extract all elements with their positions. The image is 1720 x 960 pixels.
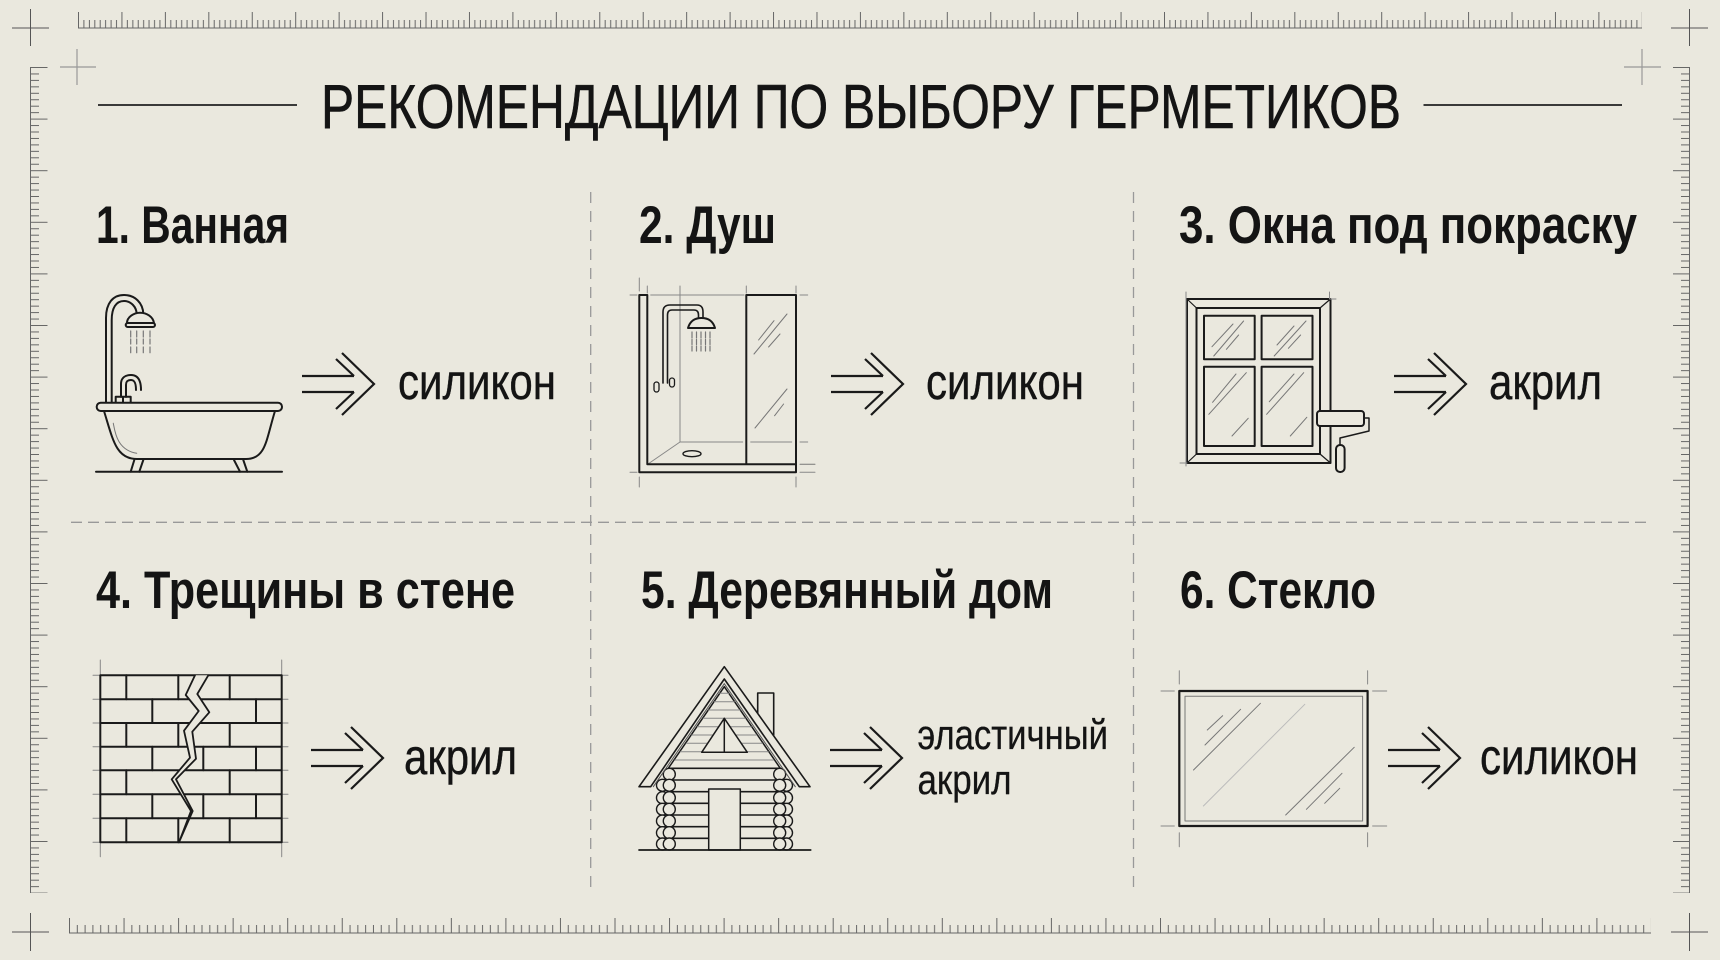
panel: 1 bath	[96, 196, 556, 472]
arrow 3	[1394, 353, 1466, 415]
result 1: силикон	[398, 354, 556, 410]
panel: 4 wall cracks	[93, 561, 517, 857]
grid dividers	[71, 192, 1649, 892]
panel: 2 shower	[630, 196, 1084, 487]
icon: glass pane	[1161, 671, 1387, 847]
result 2: силикон	[926, 354, 1084, 410]
icon: window with paint roller	[1180, 292, 1369, 472]
result 5	[918, 711, 1108, 803]
result 6: силикон	[1480, 729, 1638, 785]
icon: log cabin	[639, 667, 811, 850]
heading 4: 4. Трещины в стене	[96, 561, 515, 620]
heading 5: 5. Деревянный дом	[641, 561, 1053, 620]
panel: 3 window	[1179, 196, 1637, 472]
result 5: акрил	[918, 756, 1012, 803]
panel: 6 glass	[1161, 561, 1638, 847]
result 5: эластичный	[918, 711, 1108, 758]
icon: cracked brick wall	[93, 660, 288, 857]
arrow 5	[830, 727, 902, 789]
heading 3: 3. Окна под покраску	[1179, 196, 1637, 255]
arrow 6	[1388, 727, 1460, 789]
heading 6: 6. Стекло	[1180, 561, 1376, 620]
heading 1: 1. Ванная	[96, 196, 289, 255]
arrow 2	[831, 353, 903, 415]
title: РЕКОМЕНДАЦИИ ПО ВЫБОРУ ГЕРМЕТИКОВ	[321, 73, 1401, 142]
icon: shower cabin	[630, 278, 815, 487]
icon: bathtub with shower	[96, 295, 282, 472]
arrow 1	[302, 353, 374, 415]
heading 2: 2. Душ	[639, 196, 776, 255]
result 4: акрил	[404, 729, 517, 785]
arrow 4	[311, 727, 383, 789]
result 3: акрил	[1489, 354, 1602, 410]
panel: 5 wooden house	[639, 561, 1108, 850]
